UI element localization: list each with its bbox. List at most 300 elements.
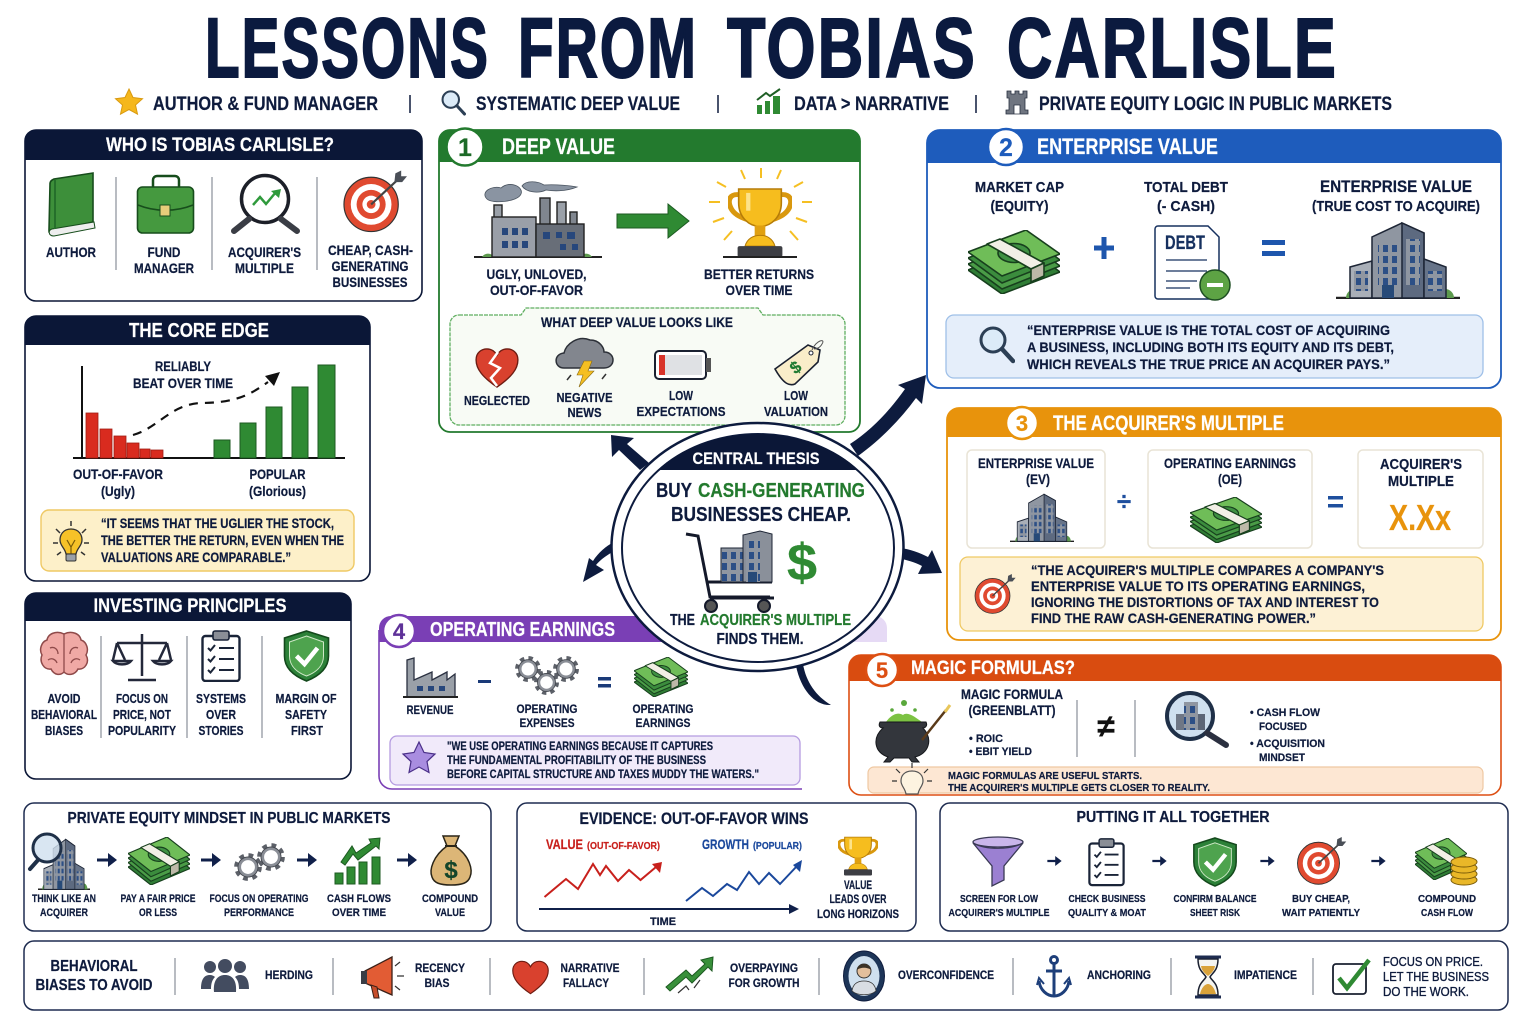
label: cash flows bbox=[327, 893, 391, 919]
label: cash flow focused: FOCUSED bbox=[1259, 721, 1307, 733]
legend: growth bbox=[702, 836, 802, 852]
icon: cash stack bbox=[634, 657, 688, 697]
conclusion bbox=[670, 612, 851, 648]
icon: factory bbox=[403, 658, 458, 697]
label: value leads: LONG HORIZONS bbox=[817, 909, 899, 921]
label: focus on operating: PERFORMANCE bbox=[224, 907, 294, 919]
conclusion: ACQUIRER'S MULTIPLE bbox=[700, 612, 851, 629]
icon: heart bbox=[513, 961, 548, 994]
tagline: data over narrative: DATA > NARRATIVE bbox=[794, 94, 949, 115]
icon: check box bbox=[1333, 960, 1369, 994]
heading: CENTRAL THESIS bbox=[692, 449, 820, 468]
callout: takeaway bbox=[868, 763, 1483, 794]
icon: brain bbox=[41, 632, 87, 674]
label: cash flows: CASH FLOWS bbox=[327, 893, 391, 905]
label: margin of safety: FIRST bbox=[291, 723, 323, 738]
label: narrative fallacy bbox=[560, 961, 620, 990]
label: overconfidence: OVERCONFIDENCE bbox=[898, 968, 994, 982]
callout: quote: BEFORE CAPITAL STRUCTURE AND TAXES MUDDY THE WATERS." bbox=[447, 769, 759, 781]
callout: quote: THE FUNDAMENTAL PROFITABILITY OF THE BUSINESS bbox=[447, 755, 706, 767]
title: FROM bbox=[518, 1, 698, 95]
icon: cash stack bbox=[1190, 497, 1262, 543]
label: negative news: NEWS bbox=[568, 405, 602, 420]
label: ugly bbox=[486, 266, 586, 298]
title: LESSONS bbox=[205, 1, 490, 95]
label: screen: SCREEN FOR LOW bbox=[960, 893, 1038, 905]
thesis: CASH-GENERATING bbox=[698, 479, 865, 502]
equals bbox=[1328, 496, 1343, 508]
arrow: to panel 2 bbox=[850, 375, 926, 456]
label: negative news bbox=[556, 390, 613, 420]
callout: quote: THE BETTER THE RETURN, EVEN WHEN THE bbox=[101, 533, 344, 548]
callout: takeaway: MAGIC FORMULAS ARE USEFUL STARTS. bbox=[948, 770, 1142, 782]
number badge: 2 bbox=[999, 134, 1013, 162]
icon: checklist bbox=[1089, 839, 1124, 885]
label: narrative fallacy: NARRATIVE bbox=[560, 961, 620, 975]
icon: star bbox=[116, 89, 142, 114]
icon: cash stack bbox=[968, 230, 1060, 294]
label: better returns: BETTER RETURNS bbox=[704, 266, 814, 282]
label: confirm: CONFIRM BALANCE bbox=[1174, 893, 1256, 905]
label: focus on price: FOCUS ON bbox=[116, 691, 168, 706]
arrow: to panel 1 bbox=[611, 435, 649, 470]
icon: trophy with rays bbox=[709, 168, 812, 257]
heading: ENTERPRISE VALUE bbox=[1037, 134, 1218, 159]
callout: quote: WHICH REVEALS THE TRUE PRICE AN ACQUIRER PAYS.” bbox=[1027, 356, 1390, 372]
panel 4: operating earnings bbox=[379, 615, 887, 789]
heading: BEHAVIORAL bbox=[50, 958, 138, 975]
arrow bbox=[397, 853, 417, 867]
label: magic formula: (GREENBLATT) bbox=[968, 703, 1056, 718]
legend: value: VALUE bbox=[546, 836, 583, 852]
label: screen: ACQUIRER'S MULTIPLE bbox=[948, 907, 1050, 919]
closing message: LET THE BUSINESS bbox=[1383, 970, 1489, 984]
label: cash flow focused: • CASH FLOW bbox=[1250, 707, 1321, 719]
panel: private equity mindset bbox=[24, 803, 491, 931]
number badge bbox=[446, 128, 484, 166]
label: magic formula bbox=[961, 687, 1063, 758]
icon: growth arrow bbox=[666, 957, 713, 993]
label: enterprise value bbox=[1312, 178, 1480, 215]
label: acquirer's multiple: ACQUIRER'S bbox=[228, 244, 301, 260]
panel: investing principles bbox=[25, 593, 351, 779]
heading: BIASES TO AVOID bbox=[36, 977, 152, 994]
heading: THE ACQUIRER'S MULTIPLE bbox=[1053, 412, 1284, 435]
label: buy cheap bbox=[1282, 893, 1360, 919]
arrow bbox=[617, 204, 689, 238]
heading: INVESTING PRINCIPLES bbox=[94, 596, 286, 617]
arrow: to panel 4 bbox=[583, 542, 618, 582]
icon: target bbox=[1298, 837, 1346, 884]
label: cash flows: OVER TIME bbox=[332, 907, 386, 919]
icon: magnifier bbox=[981, 328, 1013, 361]
panel 1: deep value bbox=[439, 128, 860, 432]
label: enterprise value: ENTERPRISE VALUE bbox=[1320, 178, 1472, 196]
arrow bbox=[1371, 856, 1386, 866]
icon: gears bbox=[236, 845, 283, 879]
label: operating earnings: OPERATING bbox=[632, 702, 694, 716]
icon: briefcase bbox=[138, 176, 194, 233]
icon: star bbox=[403, 742, 435, 772]
label: compound: COMPOUND bbox=[1418, 893, 1476, 905]
arrow: dashed trend bbox=[133, 372, 280, 435]
closing message bbox=[1383, 955, 1489, 999]
icon: factory bbox=[474, 182, 602, 257]
label: better returns: OVER TIME bbox=[726, 282, 792, 298]
box: enterprise value bbox=[967, 450, 1105, 548]
label: systems over stories: SYSTEMS bbox=[196, 691, 246, 706]
callout: quote: “THE ACQUIRER'S MULTIPLE COMPARES A COMPANY'S bbox=[1031, 562, 1384, 578]
closing message: FOCUS ON PRICE. bbox=[1383, 955, 1483, 969]
number badge: 1 bbox=[458, 134, 472, 162]
label: impatience: IMPATIENCE bbox=[1234, 968, 1297, 982]
label: cheap businesses: GENERATING bbox=[332, 258, 409, 274]
icon: gears bbox=[517, 658, 577, 693]
label: market cap bbox=[975, 179, 1064, 215]
equals bbox=[598, 677, 611, 688]
heading: MAGIC FORMULAS? bbox=[911, 658, 1075, 679]
arrow bbox=[1152, 856, 1167, 866]
number badge: 4 bbox=[393, 619, 406, 644]
label: low expectations bbox=[636, 388, 726, 419]
panel 3: the acquirer's multiple bbox=[947, 407, 1501, 640]
callout: quote: IGNORING THE DISTORTIONS OF TAX AND INTEREST TO bbox=[1031, 594, 1379, 610]
icon: scales bbox=[113, 634, 171, 680]
title: TOBIAS bbox=[727, 1, 977, 95]
icon: price tag bbox=[775, 341, 823, 385]
label: overpaying: FOR GROWTH bbox=[728, 976, 800, 990]
thesis bbox=[656, 479, 865, 526]
box: operating earnings bbox=[1148, 450, 1312, 548]
arrow: to panel 3 bbox=[898, 548, 942, 574]
arrow bbox=[1260, 856, 1275, 866]
label: screen bbox=[948, 893, 1050, 919]
icon: acquirer magnifier bbox=[30, 834, 90, 889]
label: confirm bbox=[1174, 893, 1256, 919]
label: focus on operating bbox=[210, 893, 308, 919]
label: focus on operating: FOCUS ON OPERATING bbox=[210, 893, 308, 905]
icon: debt document bbox=[1155, 226, 1230, 300]
legend: growth: (POPULAR) bbox=[753, 841, 802, 852]
box: acquirer's multiple: ACQUIRER'S bbox=[1380, 456, 1462, 473]
label: operating earnings: EARNINGS bbox=[636, 716, 690, 730]
callout: quote: FIND THE RAW CASH-GENERATING POWER.” bbox=[1031, 610, 1316, 626]
arrow bbox=[1047, 856, 1062, 866]
title bbox=[205, 1, 1338, 95]
tagline: systematic deep value: SYSTEMATIC DEEP VALUE bbox=[476, 94, 680, 115]
callout: quote: A BUSINESS, INCLUDING BOTH ITS EQUITY AND ITS DEBT, bbox=[1027, 339, 1394, 355]
icon: target bbox=[975, 574, 1016, 613]
callout: quote: “IT SEEMS THAT THE UGLIER THE STOCK, bbox=[101, 516, 334, 531]
label: cheap businesses: CHEAP, CASH- bbox=[328, 242, 413, 258]
number badge bbox=[383, 615, 415, 647]
label: buy cheap: BUY CHEAP, bbox=[1292, 893, 1350, 905]
sub heading: WHAT DEEP VALUE LOOKS LIKE bbox=[541, 315, 733, 330]
icon: low battery bbox=[655, 351, 711, 379]
chart annotation: RELIABLY bbox=[155, 359, 211, 374]
label: narrative fallacy: FALLACY bbox=[563, 976, 609, 990]
label: magic formula: MAGIC FORMULA bbox=[961, 687, 1063, 702]
arrows from central thesis bbox=[583, 375, 942, 705]
label: fund manager: FUND bbox=[148, 244, 180, 260]
number badge bbox=[1006, 407, 1038, 439]
callout: quote bbox=[41, 510, 354, 571]
label: magic formula: • ROIC bbox=[969, 733, 1003, 745]
label: fund manager bbox=[134, 244, 194, 276]
label: market cap: MARKET CAP bbox=[975, 179, 1064, 196]
label: low valuation bbox=[764, 388, 828, 419]
label: total debt: (- CASH) bbox=[1157, 198, 1215, 215]
label: cash flow focused bbox=[1250, 707, 1325, 764]
icon: money bag bbox=[431, 836, 471, 885]
arrow: to panel 5 bbox=[796, 664, 831, 705]
label: operating expenses: OPERATING bbox=[516, 702, 578, 716]
label: avoid behavioral biases: BEHAVIORAL bbox=[31, 707, 97, 722]
label: recency bias: BIAS bbox=[424, 976, 450, 990]
callout: takeaway: THE ACQUIRER'S MULTIPLE GETS CLOSER TO REALITY. bbox=[948, 782, 1210, 794]
label: acquirer's multiple: MULTIPLE bbox=[235, 260, 294, 276]
label: avoid behavioral biases: BIASES bbox=[45, 723, 83, 738]
box: enterprise value: ENTERPRISE VALUE bbox=[978, 456, 1094, 471]
icon: office building bbox=[1336, 223, 1460, 298]
label: systems over stories bbox=[196, 691, 246, 738]
icon: magnifier with building bbox=[1167, 693, 1226, 745]
label: operating expenses bbox=[516, 702, 578, 730]
chart annotation bbox=[133, 359, 233, 391]
icon: broken heart bbox=[476, 349, 518, 387]
line chart: value vs growth bbox=[539, 860, 802, 914]
chart labels: POPULAR bbox=[250, 466, 306, 482]
legend: growth: GROWTH bbox=[702, 836, 749, 852]
label: total debt: TOTAL DEBT bbox=[1144, 179, 1228, 196]
heading: OPERATING EARNINGS bbox=[430, 619, 615, 641]
arrow bbox=[201, 853, 221, 867]
tagline: private equity logic: PRIVATE EQUITY LOGIC IN PUBLIC MARKETS bbox=[1039, 94, 1392, 115]
label: focus on price: POPULARITY bbox=[108, 723, 176, 738]
box: acquirer's multiple bbox=[1358, 450, 1483, 548]
icon: magnifier with chart bbox=[234, 176, 297, 231]
label: avoid behavioral biases: AVOID bbox=[48, 691, 80, 706]
label: operating expenses: EXPENSES bbox=[520, 716, 574, 730]
label: think like an acquirer: ACQUIRER bbox=[40, 907, 88, 919]
label: check: CHECK BUSINESS bbox=[1068, 893, 1146, 905]
label: total debt bbox=[1144, 179, 1228, 215]
chart annotation: BEAT OVER TIME bbox=[133, 376, 233, 391]
conclusion: FINDS THEM. bbox=[716, 631, 804, 648]
label: value leads: VALUE bbox=[844, 880, 872, 892]
icon: funnel bbox=[973, 837, 1023, 886]
icon: storm cloud bbox=[556, 339, 613, 387]
label: pay a fair price: OR LESS bbox=[139, 907, 177, 919]
equals bbox=[1262, 240, 1285, 256]
number badge bbox=[866, 654, 898, 686]
panel 2: enterprise value bbox=[927, 129, 1501, 388]
icon: magnifier bbox=[443, 91, 464, 114]
label: ugly: OUT-OF-FAVOR bbox=[490, 282, 583, 298]
label: value leads: LEADS OVER bbox=[830, 894, 887, 906]
label: compound bbox=[1418, 893, 1476, 919]
number badge: 3 bbox=[1016, 411, 1028, 436]
heading bbox=[36, 958, 152, 994]
label: systems over stories: OVER bbox=[206, 707, 236, 722]
label: buy cheap: WAIT PATIENTLY bbox=[1282, 907, 1360, 919]
bar chart bbox=[73, 365, 345, 458]
icon: people bbox=[201, 959, 249, 992]
icon: money bag: $ bbox=[444, 857, 458, 884]
label: think like an acquirer: THINK LIKE AN bbox=[32, 893, 96, 905]
label: confirm: SHEET RISK bbox=[1190, 907, 1240, 919]
label: pay a fair price: PAY A FAIR PRICE bbox=[120, 893, 196, 905]
label: better returns bbox=[704, 266, 814, 298]
heading: WHO IS TOBIAS CARLISLE? bbox=[106, 135, 334, 156]
plus bbox=[1094, 237, 1114, 259]
label: systems over stories: STORIES bbox=[198, 723, 244, 738]
minus bbox=[478, 680, 491, 683]
chart labels: OUT-OF-FAVOR bbox=[73, 466, 163, 482]
label: market cap: (EQUITY) bbox=[990, 198, 1048, 215]
panel: putting it all together bbox=[940, 803, 1508, 931]
label: overpaying bbox=[728, 961, 800, 990]
label: operating earnings bbox=[632, 702, 694, 730]
callout: quote bbox=[946, 315, 1483, 378]
icon: trophy bbox=[839, 837, 877, 875]
icon: mirror portrait bbox=[844, 951, 884, 1001]
label: enterprise value: (TRUE COST TO ACQUIRE) bbox=[1312, 198, 1480, 215]
legend: value: (OUT-OF-FAVOR) bbox=[587, 841, 660, 852]
label: acquirer's multiple bbox=[228, 244, 301, 276]
tagline: author and fund manager: AUTHOR & FUND MANAGER bbox=[153, 94, 378, 115]
label: revenue: REVENUE bbox=[406, 703, 454, 717]
icon: rising bars bbox=[757, 89, 780, 114]
label: value leads bbox=[817, 880, 899, 921]
label: author: AUTHOR bbox=[46, 244, 96, 260]
icon: cauldron bbox=[876, 700, 950, 762]
chart labels bbox=[73, 466, 306, 499]
label: low valuation: LOW bbox=[784, 388, 809, 403]
label: anchoring: ANCHORING bbox=[1087, 968, 1151, 982]
tagline strip bbox=[116, 89, 1392, 115]
box: operating earnings: (OE) bbox=[1218, 472, 1242, 487]
box: acquirer's multiple: MULTIPLE bbox=[1388, 473, 1454, 490]
icon: cash stack bbox=[128, 837, 190, 885]
icon: shopping cart with building bbox=[686, 531, 774, 612]
conclusion: THE bbox=[670, 612, 695, 629]
icon: shield bbox=[284, 631, 328, 681]
label: compound: CASH FLOW bbox=[1421, 907, 1473, 919]
icon: anchor bbox=[1037, 956, 1071, 996]
box: acquirer's multiple: X.Xx bbox=[1389, 497, 1451, 538]
label: herding: HERDING bbox=[265, 968, 313, 982]
label: cash flow focused: • ACQUISITION bbox=[1250, 738, 1325, 750]
label: compound value: COMPOUND bbox=[422, 893, 478, 905]
label: compound value bbox=[422, 893, 478, 919]
closing message: DO THE WORK. bbox=[1383, 985, 1469, 999]
label: low valuation: VALUATION bbox=[764, 404, 828, 419]
title: CARLISLE bbox=[1007, 1, 1338, 95]
label: recency bias bbox=[415, 961, 465, 990]
label: cash flow focused: MINDSET bbox=[1259, 752, 1305, 764]
box: operating earnings: OPERATING EARNINGS bbox=[1164, 456, 1296, 471]
thesis: BUSINESSES CHEAP. bbox=[671, 503, 851, 526]
heading: DEEP VALUE bbox=[502, 134, 615, 159]
panel 5: magic formulas bbox=[849, 654, 1501, 795]
icon: light bulb bbox=[53, 521, 89, 561]
legend: value bbox=[546, 836, 660, 852]
label: fund manager: MANAGER bbox=[134, 260, 194, 276]
sub-panel: what deep value looks like bbox=[450, 308, 845, 425]
icon: castle bbox=[1006, 91, 1028, 114]
label: think like an acquirer bbox=[32, 893, 96, 919]
label: pay a fair price bbox=[120, 893, 196, 919]
label: low expectations: EXPECTATIONS bbox=[636, 404, 726, 419]
icon: building bbox=[1010, 494, 1074, 541]
callout: quote: "WE USE OPERATING EARNINGS BECAUSE IT CAPTURES bbox=[447, 741, 713, 753]
label: compound value: VALUE bbox=[435, 907, 465, 919]
divide sign: ÷ bbox=[1117, 486, 1131, 516]
callout: quote bbox=[960, 557, 1483, 631]
panel: who is Tobias Carlisle bbox=[25, 130, 422, 301]
box: enterprise value: (EV) bbox=[1026, 472, 1050, 487]
label: ugly: UGLY, UNLOVED, bbox=[486, 266, 586, 282]
panel: the core edge bbox=[25, 316, 370, 581]
label: negative news: NEGATIVE bbox=[556, 390, 613, 405]
icon: debt document: DEBT bbox=[1165, 233, 1205, 254]
callout: quote bbox=[390, 736, 800, 785]
panel: evidence bbox=[517, 803, 916, 931]
label: recency bias: RECENCY bbox=[415, 961, 465, 975]
callout: quote: ENTERPRISE VALUE TO ITS OPERATING EARNINGS, bbox=[1031, 578, 1365, 594]
arrow bbox=[97, 853, 117, 867]
icon: checklist bbox=[202, 631, 240, 681]
callout: quote: “ENTERPRISE VALUE IS THE TOTAL COST OF ACQUIRING bbox=[1027, 322, 1390, 338]
label: margin of safety: MARGIN OF bbox=[276, 691, 337, 706]
icon: shield bbox=[1194, 838, 1236, 886]
panel: behavioral biases bbox=[24, 941, 1508, 1010]
heading: EVIDENCE: OUT-OF-FAVOR WINS bbox=[580, 810, 808, 828]
heading: PUTTING IT ALL TOGETHER bbox=[1076, 809, 1270, 826]
icon: dollar sign: $ bbox=[787, 534, 817, 592]
callout: quote: VALUATIONS ARE COMPARABLE.” bbox=[101, 550, 291, 565]
central thesis ellipse bbox=[612, 423, 904, 671]
label: low expectations: LOW bbox=[669, 388, 694, 403]
label: check bbox=[1068, 893, 1146, 919]
icon: megaphone bbox=[361, 957, 404, 998]
label: cheap businesses: BUSINESSES bbox=[332, 274, 408, 290]
label: focus on price bbox=[108, 691, 176, 738]
icon: light bulb bbox=[892, 763, 932, 794]
label: check: QUALITY & MOAT bbox=[1068, 907, 1146, 919]
icon: cash and coins bbox=[1415, 838, 1477, 885]
chart labels: (Glorious) bbox=[249, 483, 306, 499]
axis label: TIME bbox=[650, 916, 676, 928]
label: neglected: NEGLECTED bbox=[464, 393, 530, 408]
label: overpaying: OVERPAYING bbox=[730, 961, 798, 975]
label: cheap businesses bbox=[328, 242, 413, 290]
arrow bbox=[297, 853, 317, 867]
label: margin of safety: SAFETY bbox=[285, 707, 327, 722]
heading: THE CORE EDGE bbox=[129, 320, 269, 342]
icon: hourglass bbox=[1195, 957, 1221, 997]
chart labels: (Ugly) bbox=[101, 483, 135, 499]
not equal: ≠ bbox=[1097, 708, 1115, 744]
thesis: BUY bbox=[656, 479, 692, 502]
heading: PRIVATE EQUITY MINDSET IN PUBLIC MARKETS bbox=[68, 810, 391, 827]
icon: book bbox=[49, 173, 95, 236]
number badge bbox=[988, 129, 1024, 165]
label: margin of safety bbox=[276, 691, 337, 738]
label: focus on price: PRICE, NOT bbox=[113, 707, 171, 722]
label: avoid behavioral biases bbox=[31, 691, 97, 738]
